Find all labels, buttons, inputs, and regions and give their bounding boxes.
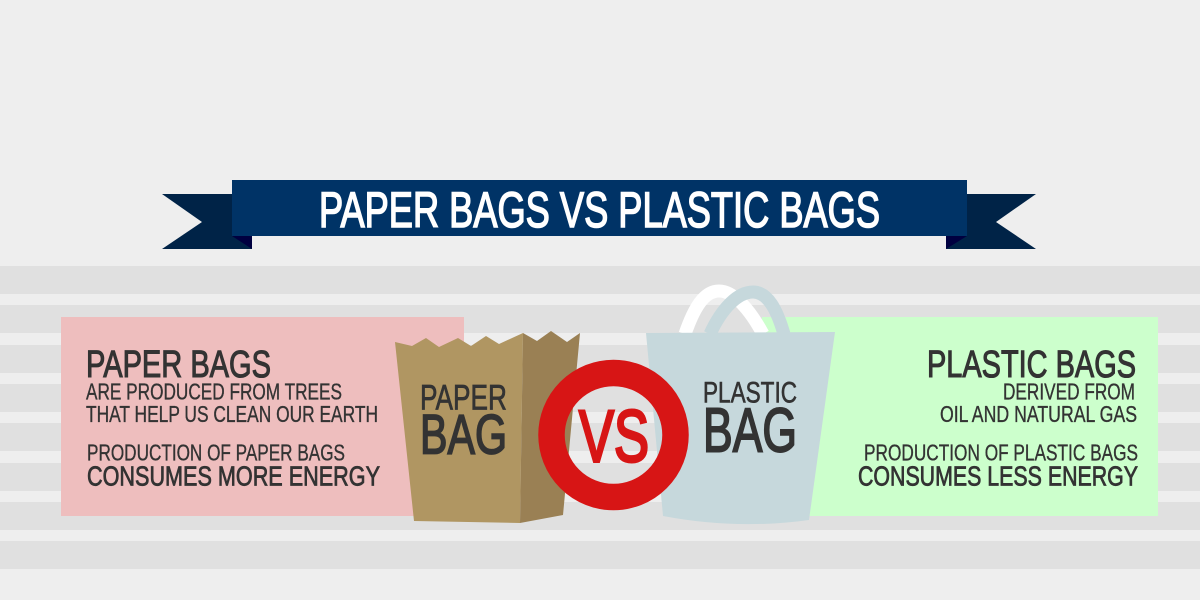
paper bags description — [86, 378, 378, 466]
icon: paper bag — [395, 331, 580, 523]
title: PAPER BAGS VS PLASTIC BAGS — [319, 182, 880, 238]
paper bags heading: PAPER BAGS — [86, 344, 271, 386]
panel: plastic bags — [762, 317, 1158, 516]
title ribbon — [162, 180, 1036, 249]
versus badge — [552, 373, 676, 497]
paper bags description: ARE PRODUCED FROM TREES — [86, 378, 342, 404]
plastic bag label: BAG — [703, 397, 797, 466]
plastic bag label: PLASTIC — [703, 377, 797, 410]
plastic bags description: DERIVED FROM — [1003, 378, 1135, 404]
paper bag label — [420, 378, 507, 466]
paper bag label: PAPER — [420, 378, 507, 418]
paper bag label: BAG — [420, 403, 507, 466]
paper bags energy claim: CONSUMES MORE ENERGY — [87, 460, 380, 492]
paper bags description: PRODUCTION OF PAPER BAGS — [87, 440, 345, 466]
icon: plastic bag — [646, 291, 835, 524]
plastic bags description — [864, 378, 1138, 466]
paper bags description: THAT HELP US CLEAN OUR EARTH — [86, 401, 378, 427]
plastic bag label — [703, 377, 797, 466]
panel: paper bags — [61, 317, 464, 516]
plastic bags heading: PLASTIC BAGS — [927, 344, 1136, 386]
VS text: VS — [579, 396, 649, 478]
plastic bags description: OIL AND NATURAL GAS — [940, 401, 1137, 427]
